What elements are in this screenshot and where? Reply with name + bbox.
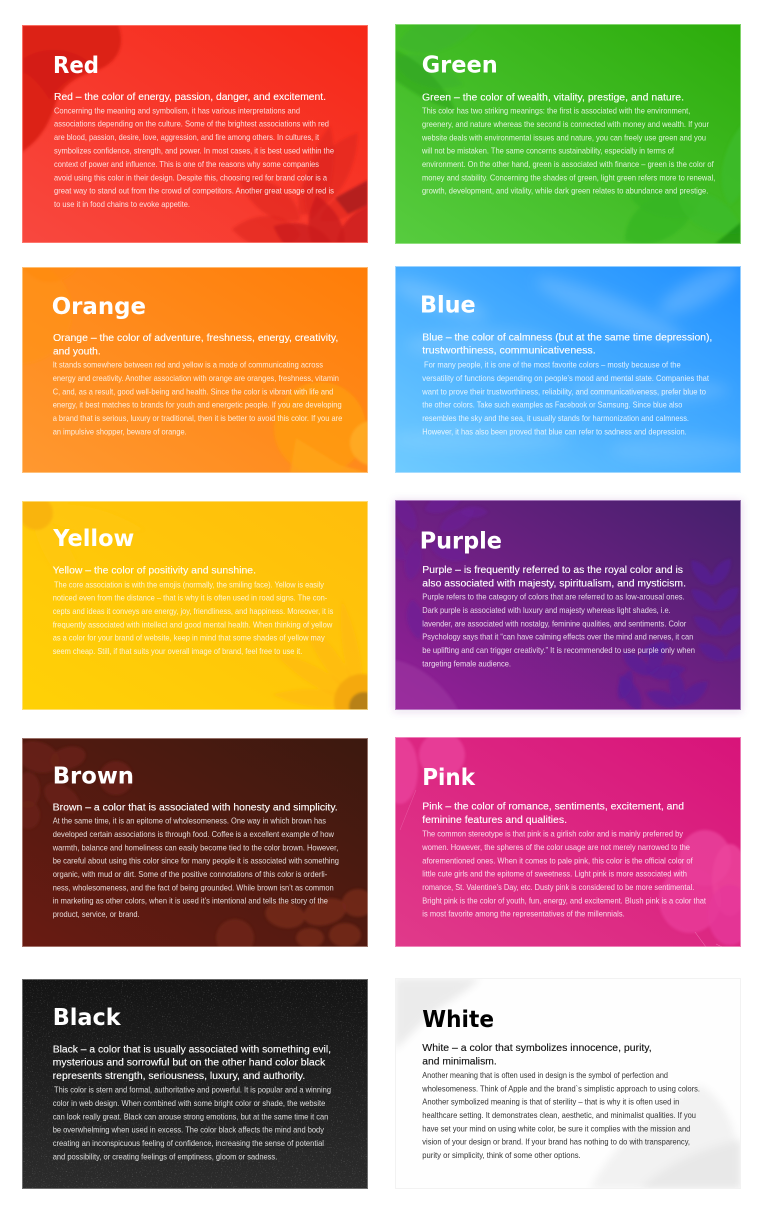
subheading: Blue (422, 332, 712, 357)
text block: Pink: is most favorite among the representatives of the millennials. (422, 909, 625, 919)
text block: Blue (421, 360, 710, 436)
heading: Purple: Purple (420, 528, 502, 554)
subheading: White: White – a color that symbolizes innocence, purity, (422, 1043, 652, 1054)
text block: Black: can look really great. Black can arouse strong emotions, but at the same time it can (53, 1111, 329, 1121)
heading: Brown: Brown (53, 764, 134, 790)
panel: brown (12, 735, 374, 957)
text block: Green: will not be mistaken. The same concerns sustainability, especially in terms of (421, 146, 675, 156)
subheading: Yellow: Yellow – the color of positivity and sunshine. (53, 566, 256, 577)
heading: Pink: Pink (422, 765, 476, 791)
text block: Black: color in web design. When combined with some bright color or shade, the website (53, 1098, 326, 1108)
panel: yellow (22, 501, 368, 710)
text block: Blue: For many people, it is one of the most favorite colors – mostly because of the (424, 360, 681, 370)
text block: Orange: a brand that is serious, luxury or traditional, then it is better to avoid this color. If you are (53, 413, 343, 423)
text block: Blue: resembles the sky and the sea, it usually stands for harmonization and calmness. (422, 413, 689, 423)
text block: Purple: Purple refers to the category of colors that are referred to as low-arousal ones. (422, 592, 685, 602)
text block: Brown: in marketing as other colors, when it is used it’s intentional and tells the story of the (53, 896, 328, 906)
text block: Blue: However, it has also been proved that blue can refer to sadness and depression. (422, 426, 687, 436)
text block: White: wholesomeness. Think of Apple and the brand`s simplistic approach to using colors. (421, 1083, 700, 1093)
heading: White: White (422, 1007, 494, 1033)
subheading: White (422, 1043, 652, 1067)
subheading: Black: Black – a color that is usually associated with something evil, (53, 1044, 331, 1055)
panel: black (22, 979, 368, 1189)
subheading: Red: Red – the color of energy, passion, danger, and excitement. (54, 92, 326, 103)
text block: Yellow: noticed even from the distance – that is why it is often used in road signs. The con- (53, 593, 328, 603)
text block: Yellow: The core association is with the emojis (normally, the smiling face). Yellow is easily (54, 579, 325, 589)
panel: orange (22, 267, 368, 473)
subheading: Pink: feminine features and qualities. (422, 815, 567, 826)
subheading: Green: Green – the color of wealth, vitality, prestige, and nature. (422, 92, 684, 103)
text block: Black: be overwhelming when used in excess. The color black affects the mind and body (53, 1125, 325, 1135)
subheading: Pink: Pink – the color of romance, sentiments, excitement, and (422, 802, 684, 813)
text block: Yellow: cepts and ideas it conveys are energy, joy, friendliness, and happiness. Moreover, it is (53, 606, 333, 616)
text block: Red: context of power and influence. This is one of the reasons why some companies (54, 159, 319, 169)
panel: blue (389, 257, 750, 473)
heading: Blue: Blue (420, 292, 476, 318)
text block: Brown: ness, wholesomeness, and the fact of being grounded. While brown isn’t as common (53, 882, 334, 892)
panel: green (395, 24, 741, 244)
text block: Black: creating an inconspicuous feeling of confidence, increasing the sense of potential (53, 1138, 324, 1148)
text block: Green: growth, development, and vitality, while dark green relates to abundance and prestige. (422, 186, 708, 196)
subheading: Black: represents strength, seriousness, luxury, and authority. (53, 1071, 305, 1082)
text block: Blue: versatility of functions depending on people’s mood and mental state. Companies that (422, 373, 710, 383)
panel: red (22, 25, 368, 243)
subheading: Black (53, 1044, 331, 1082)
subheading: Orange: Orange – the color of adventure, freshness, energy, creativity, (53, 333, 338, 344)
text block: Orange: energy and creativity. Another association with orange are oranges, freshness, vitamin (53, 373, 339, 383)
text block: Yellow (53, 579, 333, 656)
text block: Purple: lavender, are associated with nostalgy, feminine qualities, and sentiments. Color (422, 618, 687, 628)
subheading: Orange: and youth. (53, 346, 101, 357)
text block: Pink: aforementioned ones. When it comes to pale pink, this color is the official color of (422, 855, 693, 865)
text block: Pink: romance, St. Valentine’s Day, etc. Dusty pink is considered to be more sentimental. (422, 882, 694, 892)
text block: Orange: energy, it best matches to brands for youth and energetic people. If you are developing (53, 400, 342, 410)
heading: Red: Red (53, 53, 99, 79)
subheading: White: and minimalism. (422, 1056, 497, 1067)
text block: Black: This color is stern and formal, authoritative and powerful. It is popular and a winning (54, 1085, 331, 1095)
text block: Green (421, 106, 715, 196)
text block: Black (53, 1085, 331, 1161)
subheading: Blue: Blue – the color of calmness (but at the same time depression), (422, 332, 712, 343)
text block: Brown: At the same time, it is an epitome of wholesomeness. One way in which brown has (53, 816, 326, 826)
text block: Green: This color has two striking meanings: the first is associated with the environment, (422, 106, 690, 116)
text block: Orange: It stands somewhere between red and yellow is a mode of communicating across (53, 360, 323, 370)
text block: White: Another symbolized meaning is that of sterility – that is why it is often used in (422, 1097, 680, 1107)
text block: Orange: C, and, as a result, good well-being and health. Since the color is vibrant with life and (53, 386, 334, 396)
heading: Green: Green (422, 53, 498, 79)
text block: Purple: Dark purple is associated with luxury and majesty whereas light shades, i.e. (422, 605, 671, 615)
text block: Pink (421, 829, 707, 919)
panel: white (395, 978, 741, 1189)
text block: Orange: an impulsive shopper, beware of orange. (53, 426, 187, 436)
text block: Red: great way to stand out from the crowd of competitors. Another great usage of red is (54, 186, 334, 196)
text block: Brown: be careful about using this color since for many people it is associated with something (53, 856, 339, 866)
subheading: Brown: Brown – a color that is associated with honesty and simplicity. (53, 803, 338, 814)
text block: White (421, 1070, 700, 1160)
text block: Blue: the other colors. Take such examples as Facebook or Samsung. Since blue also (422, 400, 683, 410)
text block: White: have set your mind on using white color, be sure it complies with the mission and (422, 1123, 691, 1133)
panel: purple (373, 489, 752, 714)
subheading: Purple: Purple – is frequently referred to as the royal color and is (422, 565, 683, 576)
text block: Red: avoid using this color in their design. Despite this, choosing red for brand color is a (54, 172, 327, 182)
text block: Orange (53, 360, 343, 436)
text block: Pink: The common stereotype is that pink is a girlish color and is mainly preferred by (422, 829, 684, 839)
heading: Yellow: Yellow (52, 526, 134, 552)
text block: Pink: little cute girls and the epitome of sweetness. Light pink is more associated with (422, 869, 687, 879)
text block: Purple (422, 592, 695, 668)
text block: Pink: Bright pink is the color of youth, fun, energy, and excitement. Blush pink is a color that (422, 895, 707, 905)
text block: Green: money and stability. Concerning the shades of green, light green refers more to renewal, (422, 172, 715, 182)
text block: Red: to use it in food chains to evoke appetite. (54, 199, 190, 209)
text block: Red: Concerning the meaning and symbolism, it has various interpretations and (54, 105, 300, 115)
text block: Yellow: seem cheap. Still, if that suits your overall image of brand, feel free to use it. (53, 646, 302, 656)
text block: Blue: want to prove their trustworthiness, reliability, and communicativeness, prefer blue to (421, 386, 706, 396)
text block: Green: greenery, and nature whereas the second is connected with money and wealth. If your (422, 119, 709, 129)
text block: Brown: developed certain associations is through food. Coffee is a excellent example of how (53, 829, 335, 839)
subheading: Pink (422, 802, 684, 826)
text block: Red (54, 105, 334, 209)
text block: Red: associations depending on the culture. Some of the brightest associations with red (54, 119, 329, 129)
text block: Pink: women. However, the spheres of the color usage are not merely narrowed to the (421, 842, 690, 852)
text block: Purple: Psychology says that it “can have calming effects over the mind and nerves, it can (422, 632, 694, 642)
text block: Black: and possibility, or creating feelings of emptiness, gloom or sadness. (53, 1151, 277, 1161)
text block: Red: symbolizes confidence, strength, and power. In most cases, it is best used within the (54, 145, 334, 155)
text block: Purple: be uplifting and can trigger creativity.” It is recommended to use purple only when (422, 645, 695, 655)
heading: Black: Black (53, 1005, 121, 1031)
heading: Orange: Orange (52, 294, 146, 320)
subheading: Black: mysterious and sorrowful but on the other hand color black (53, 1058, 326, 1069)
text block: Red: are blood, passion, desire, love, aggression, and fire among others. In cultures, it (54, 132, 320, 142)
text block: Brown: warmth, balance and homeliness can easily become tied to the color brown. However, (52, 842, 338, 852)
text block: Brown: product, service, or brand. (53, 909, 140, 919)
subheading: Purple (422, 565, 686, 589)
text block: Yellow: frequently associated with intellect and good mental health. When thinking of yellow (53, 619, 333, 629)
text block: Yellow: as a color for your brand of website, keep in mind that some shades of yellow may (53, 633, 325, 643)
text block: Brown: organic, with mud or dirt. Some of the positive connotations of this color is orderli- (53, 869, 328, 879)
text block: Green: website deals with environmental issues and nature, you can freely use green and you (421, 132, 706, 142)
text block: White: healthcare setting. It demonstrates clean, aesthetic, and minimalist qualities. If you (422, 1110, 696, 1120)
text block: White: purity or simplicity, think of some other options. (422, 1150, 581, 1160)
text block: White: vision of your design or brand. If your brand has nothing to do with transparency, (422, 1137, 690, 1147)
subheading: Blue: trustworthiness, communicativeness. (422, 346, 596, 357)
panel: pink (382, 732, 752, 947)
text block: Purple: targeting female audience. (422, 658, 511, 668)
subheading: Purple: also associated with majesty, spiritualism, and mysticism. (422, 578, 686, 589)
text block: Green: environment. On the other hand, green is associated with finance – green is the color of (422, 159, 714, 169)
subheading: Orange (53, 333, 338, 357)
text block: Brown (52, 816, 339, 919)
text block: White: Another meaning that is often used in design is the symbol of perfection and (422, 1070, 668, 1080)
